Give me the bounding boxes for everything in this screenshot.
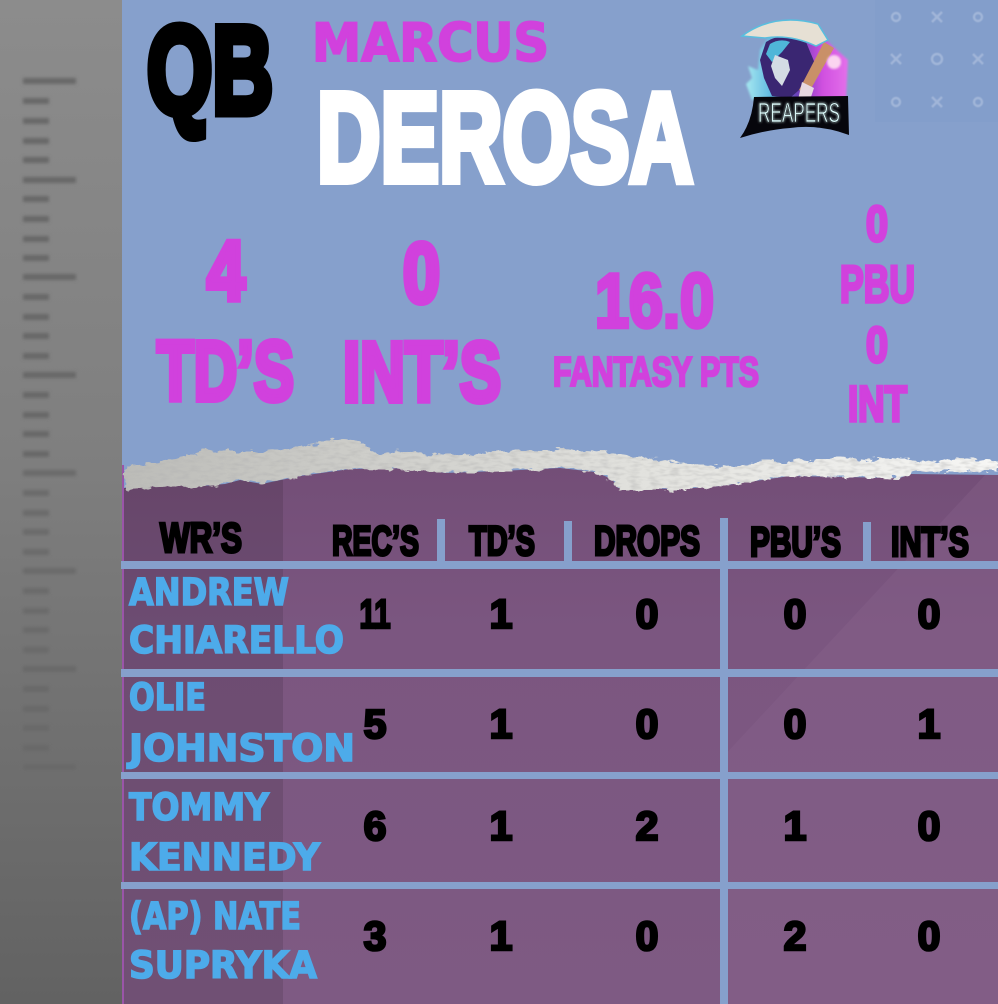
stat: defensive: INT	[848, 376, 907, 432]
table header row: REC’S	[332, 517, 419, 564]
table values: 2	[784, 913, 806, 959]
table values: 0	[784, 701, 806, 747]
table values: 1	[490, 803, 512, 849]
table values: 0	[636, 701, 658, 747]
stat: interceptions: 0	[403, 226, 440, 320]
table values	[360, 591, 940, 959]
stat: defensive	[840, 196, 915, 432]
table values: 1	[490, 701, 512, 747]
table values: 0	[636, 591, 658, 637]
player first name: MARCUS	[312, 13, 549, 74]
table values: 1	[490, 913, 512, 959]
table values: 0	[918, 913, 940, 959]
team logo: Reapers	[740, 20, 849, 138]
table values: 1	[918, 701, 940, 747]
stat: touchdowns	[157, 224, 294, 418]
stat: fantasy points: 16.0	[595, 259, 714, 344]
team logo: Reapers: REAPERS	[758, 97, 840, 128]
stat: defensive: PBU	[840, 256, 915, 314]
table values: 6	[364, 803, 386, 849]
stat: fantasy points	[553, 259, 759, 395]
table values: 1	[784, 803, 806, 849]
player last name: DEROSA	[317, 67, 693, 208]
table header row: INT’S	[891, 518, 969, 565]
stat: defensive: 0	[866, 317, 888, 373]
table header row: TD’S	[469, 517, 535, 564]
table values: 5	[364, 701, 386, 747]
table grid lines	[121, 518, 998, 1004]
table header row: WR’S	[160, 514, 242, 561]
player names: KENNEDY	[129, 836, 321, 879]
player names: ANDREW	[129, 571, 289, 614]
blue background	[122, 0, 998, 480]
player names: SUPRYKA	[129, 944, 317, 987]
player names: TOMMY	[129, 786, 270, 829]
table values: 11	[360, 591, 390, 637]
table values: 2	[636, 803, 658, 849]
player names: JOHNSTON	[126, 727, 355, 770]
stat: defensive: 0	[866, 196, 888, 252]
stat: touchdowns: 4	[207, 224, 245, 318]
table values: 0	[784, 591, 806, 637]
position label: QB	[147, 2, 273, 140]
player names: CHIARELLO	[129, 619, 344, 662]
table header row: PBU’S	[750, 518, 841, 565]
table values: 1	[490, 591, 512, 637]
decorative play diagram	[875, 0, 998, 122]
player names: OLIE	[129, 676, 206, 719]
table header row: DROPS	[594, 517, 700, 564]
stat: interceptions	[343, 226, 501, 419]
stat: interceptions: INT’S	[343, 325, 501, 419]
table values: 0	[636, 913, 658, 959]
table header row	[160, 514, 969, 565]
grey left sidebar	[0, 0, 122, 1004]
torn paper edge	[125, 438, 998, 490]
stat: touchdowns: TD’S	[157, 324, 294, 418]
table values: 0	[918, 803, 940, 849]
table values: 0	[918, 591, 940, 637]
player names: (AP) NATE	[129, 895, 301, 938]
purple table panel	[122, 465, 998, 1004]
table values: 3	[364, 913, 386, 959]
player names	[126, 571, 355, 987]
stat: fantasy points: FANTASY PTS	[553, 348, 759, 395]
